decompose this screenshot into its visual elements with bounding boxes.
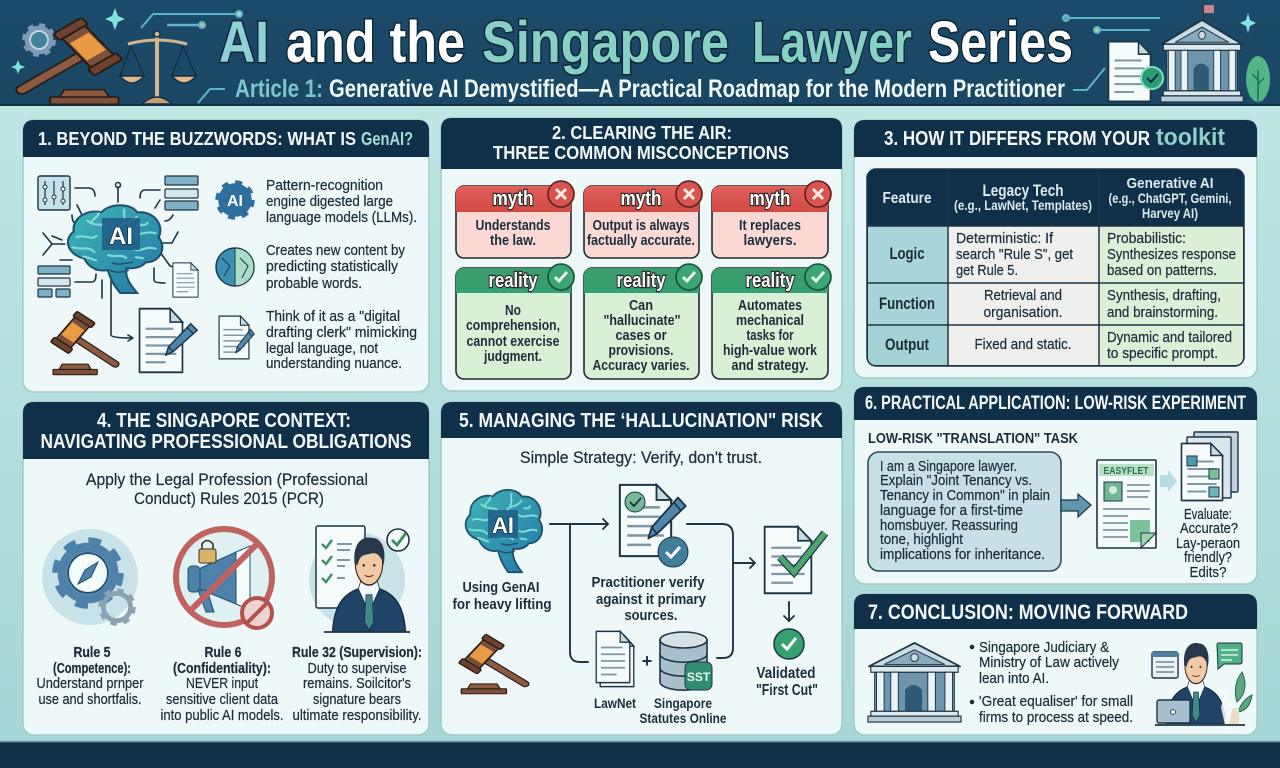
subheading: LOW-RISK "TRANSLATION" TASK	[868, 430, 1078, 447]
text: practitioner: sources.	[624, 607, 678, 624]
icon: AI brain	[466, 490, 542, 572]
myth card 1	[456, 181, 574, 258]
text: pattern recognition: engine digested large	[266, 193, 393, 210]
icon: data rows top	[165, 176, 198, 210]
network connectors	[43, 182, 178, 341]
panel 5: hallucination risk	[441, 402, 842, 735]
reality card 2	[584, 264, 702, 379]
subtitle: Generative AI Demystified—A Practical Roadmap for the Modern Practitioner	[329, 75, 1065, 103]
row: output: Output	[885, 335, 929, 354]
prompt box	[868, 452, 1061, 571]
bullet one: Singapore Judiciary &	[979, 639, 1109, 656]
arrow to flyer	[1061, 494, 1091, 517]
intro text: Apply the Legal Profession (Professional	[86, 470, 368, 489]
icon: tree	[1246, 56, 1270, 104]
row: function: Function	[879, 294, 935, 313]
rule 5 text: Understand prnper	[36, 675, 144, 692]
rule 32 text: remains. Soilcitor's	[303, 675, 411, 692]
text: practitioner: Practitioner verify	[592, 574, 705, 591]
icon: document right	[173, 263, 198, 297]
reality card 3: mechanical	[736, 313, 804, 329]
heading 4: NAVIGATING PROFESSIONAL OBLIGATIONS	[40, 431, 412, 453]
bullet one: lean into AI.	[979, 670, 1049, 687]
text: evaluate: Edits?	[1190, 564, 1226, 581]
prompt box: Explain "Joint Tenancy vs.	[880, 472, 1032, 489]
rule 5 text: (Competence):	[53, 661, 131, 677]
row: logic	[890, 230, 1236, 279]
icon: validated document	[765, 527, 825, 593]
text: using GenAI: Using GenAI	[462, 579, 540, 596]
reality card 1: No	[505, 303, 521, 319]
icon: AI gear: AI	[227, 193, 243, 210]
bullet two: 'Great equaliser' for small	[979, 693, 1133, 710]
table header row	[882, 175, 1232, 221]
title: AI	[219, 10, 269, 75]
table header row: Legacy Tech	[982, 181, 1064, 200]
panel 7: conclusion	[854, 594, 1257, 735]
decorative circuit lines right	[1063, 13, 1256, 90]
text: drafting clerk: understanding nuance.	[266, 355, 402, 372]
title: Singapore	[482, 10, 729, 75]
reality card 3: and strategy.	[732, 358, 808, 374]
bullet one: Ministry of Law actively	[979, 654, 1119, 671]
reality card 3	[712, 264, 831, 379]
rule 6 text: into public AI models.	[160, 707, 284, 724]
strategy line: Simple Strategy: Verify, don't trust.	[520, 448, 762, 467]
myth card 2	[584, 181, 702, 258]
reality card 2: "hallucinate"	[604, 313, 680, 329]
icon: gavel	[50, 311, 115, 375]
text: evaluate: Accurate?	[1180, 520, 1238, 537]
prompt box: homsbuyer. Reassuring	[880, 517, 1018, 534]
reality card 1: cannot exercise	[466, 334, 560, 350]
row: logic: based on patterns.	[1107, 262, 1217, 279]
text: evaluate	[1176, 506, 1240, 581]
icon: split brain	[216, 248, 254, 286]
icon: lawyer with laptop	[1152, 643, 1252, 734]
text: pattern recognition: language models (LLMs).	[266, 209, 417, 226]
comparison table	[867, 169, 1244, 366]
icon: large document with pen	[140, 309, 197, 372]
icon: data rows left	[38, 266, 70, 297]
source labels: Singapore	[654, 695, 712, 711]
prompt box: I am a Singapore lawyer.	[880, 458, 1017, 475]
row: output: Dynamic and tailored	[1107, 329, 1232, 346]
row: function: organisation.	[984, 304, 1062, 321]
source labels: LawNet	[594, 695, 636, 711]
myth card 1: the law.	[490, 233, 536, 249]
heading 2: 2. CLEARING THE AIR:	[552, 122, 732, 143]
source labels: Statutes Online	[640, 710, 727, 726]
icon: circuit box	[38, 176, 70, 210]
text: using GenAI	[452, 579, 552, 613]
reality card 1	[456, 264, 574, 379]
title	[219, 10, 1073, 75]
heading 1: GenAI?	[361, 128, 413, 149]
rule 5 text: Rule 5	[74, 645, 110, 661]
text: creates content: probable words.	[266, 275, 362, 292]
bullet two	[970, 693, 1133, 726]
intro text: Conduct) Rules 2015 (PCR)	[134, 489, 324, 508]
row: logic: get Rule 5.	[956, 262, 1018, 279]
rule 32 text: signature bears	[313, 691, 401, 708]
panel 4: Singapore context	[23, 402, 429, 735]
text: evaluate: friendly?	[1184, 549, 1232, 566]
table header row: (e.g., ChatGPT, Gemini,	[1108, 190, 1232, 206]
rule 6 text: (Confidentiality):	[173, 661, 271, 677]
panel 6: practical application	[854, 387, 1257, 584]
icon: AI brain: AI	[109, 223, 133, 250]
reality card 3: high-value work	[723, 343, 818, 359]
icon: supervising solicitor	[309, 526, 410, 632]
icon: courthouse	[868, 643, 961, 722]
icon: statutes database: SST	[687, 670, 711, 684]
myth card 2: Output is always	[592, 218, 690, 234]
row: output	[885, 329, 1232, 362]
reality card 3: tasks for	[746, 328, 794, 344]
icon: gavel	[22, 18, 123, 104]
myth card 2: myth	[620, 188, 662, 210]
reality card 1: reality	[488, 270, 538, 292]
reality card 2: cases or	[616, 328, 667, 344]
reality card 2: reality	[616, 270, 666, 292]
table header row: (e.g., LawNet, Templates)	[954, 197, 1092, 213]
table header row: Generative AI	[1126, 175, 1214, 192]
top banner	[0, 0, 1280, 106]
myth card 2: factually accurate.	[587, 233, 695, 249]
title: Lawyer	[752, 10, 912, 75]
bullet two: firms to process at speed.	[979, 709, 1133, 726]
myth card 3: It replaces	[739, 218, 801, 234]
text: creates content	[266, 242, 405, 292]
icon: scales of justice	[120, 31, 196, 104]
source labels	[594, 695, 727, 726]
text: using GenAI: for heavy lifting	[452, 596, 552, 613]
icon: AI brain	[68, 205, 162, 293]
icon: AI brain: AI	[492, 513, 514, 538]
heading 2	[493, 122, 789, 163]
reality card 3: Automates	[738, 298, 802, 314]
text: drafting clerk: legal language, not	[266, 340, 379, 357]
table header row: Feature	[882, 190, 932, 207]
reality card 1: judgment.	[483, 349, 542, 365]
rule 5 text: use and shortfalis.	[38, 691, 142, 708]
rule 6 text	[160, 645, 284, 724]
reality card 2: Can	[629, 298, 653, 314]
row: output: Fixed and static.	[974, 336, 1072, 353]
rule 32 text: Duty to supervise	[308, 660, 406, 677]
flow arrows	[550, 519, 794, 662]
row: output: to specific prompt.	[1107, 345, 1218, 362]
light arrow	[1160, 470, 1177, 492]
text: pattern recognition: Pattern-recognition	[266, 177, 383, 194]
bullet one	[970, 639, 1119, 687]
icon: green check	[774, 629, 804, 659]
myth card 1: myth	[492, 188, 534, 210]
icon: statutes database	[660, 632, 712, 690]
text: practitioner	[592, 574, 707, 624]
text: practitioner: against it primary	[596, 591, 707, 608]
text: creates content: predicting statistically	[266, 258, 398, 275]
icon: document and pen	[219, 316, 254, 359]
text: creates content: Creates new content by	[266, 242, 405, 259]
myth card 3: myth	[750, 188, 790, 210]
heading 7: 7. CONCLUSION: MOVING FORWARD	[868, 601, 1188, 624]
row: function: Synthesis, drafting,	[1107, 287, 1221, 304]
table header row: Harvey AI)	[1142, 205, 1198, 221]
text: evaluate: Lay-peraon	[1176, 535, 1240, 552]
panel 3: comparison toolkit	[854, 120, 1257, 378]
heading 5: 5. MANAGING THE ‘HALLUCINATION" RISK	[459, 410, 823, 432]
plus sign: +	[642, 651, 652, 671]
reality card 3: reality	[746, 270, 795, 292]
text: drafting clerk: drafting clerk" mimicking	[266, 324, 417, 341]
panel 1: what is GenAI	[23, 120, 429, 392]
reality card 2: Accuracy varies.	[592, 358, 690, 374]
icon: confidentiality no-megaphone	[176, 529, 272, 628]
title: and the	[286, 10, 465, 75]
prompt box: language for a first-time	[880, 502, 1023, 519]
row: logic: Logic	[890, 244, 924, 263]
subtitle: Article 1:	[235, 75, 323, 103]
title: Series	[928, 10, 1073, 75]
panel 2: misconceptions	[441, 118, 842, 391]
text: pattern recognition	[266, 177, 417, 226]
intro text	[86, 470, 368, 508]
icon: gear	[24, 25, 54, 55]
row: logic: Probabilistic:	[1107, 230, 1186, 247]
rule 6 text: Rule 6	[204, 645, 242, 661]
rule 32 text	[292, 645, 422, 724]
prompt box: implications for inheritance.	[880, 546, 1045, 563]
decorative circuit lines left	[11, 8, 242, 103]
icon: EASYFLET flyer	[1097, 460, 1156, 548]
row: function	[879, 287, 1221, 321]
icon: courthouse	[1161, 5, 1243, 102]
icon: signed document	[1108, 42, 1163, 101]
text: drafting clerk: Think of it as a "digital	[266, 308, 400, 325]
row: function: Retrieval and	[984, 287, 1062, 304]
text: validated first cut: "First Cut"	[756, 682, 818, 699]
icon: document stack	[1181, 432, 1238, 500]
icon: practitioner document	[620, 485, 688, 567]
rule 32 text: Rule 32 (Supervision):	[292, 645, 422, 661]
myth card 3: lawyers.	[744, 233, 796, 249]
text: drafting clerk	[266, 308, 417, 372]
heading 4: 4. THE SINGAPORE CONTEXT:	[97, 410, 351, 432]
icon: gavel	[459, 634, 525, 694]
row: function: and brainstorming.	[1107, 304, 1218, 321]
text: validated first cut	[756, 665, 818, 699]
prompt box: tone, highlight	[880, 531, 964, 548]
text: validated first cut: Validated	[756, 665, 816, 682]
reality card 2: provisions.	[608, 343, 674, 359]
heading 2: THREE COMMON MISCONCEPTIONS	[493, 142, 789, 163]
icon: EASYFLET flyer: EASYFLET	[1104, 466, 1148, 477]
row: logic: Deterministic: If	[956, 230, 1054, 247]
prompt box: Tenancy in Common" in plain	[880, 487, 1050, 504]
myth card 3	[712, 181, 831, 258]
heading 4	[40, 410, 412, 453]
icon: AI gear	[217, 182, 253, 218]
heading 3: toolkit	[1156, 124, 1225, 151]
icon: competence gears	[42, 529, 138, 625]
rule 6 text: sensitive client data	[166, 691, 279, 708]
reality card 1: comprehension,	[466, 318, 560, 334]
rule 5 text	[36, 645, 144, 708]
icon: LawNet document	[596, 631, 634, 687]
footer band	[0, 741, 1280, 768]
row: logic: search "Rule S", get	[956, 246, 1074, 263]
heading 1: 1. BEYOND THE BUZZWORDS: WHAT IS	[38, 128, 356, 149]
heading 3: 3. HOW IT DIFFERS FROM YOUR	[884, 128, 1150, 150]
row: logic: Synthesizes response	[1107, 246, 1236, 263]
text: evaluate: Evaluate:	[1184, 506, 1232, 523]
rule 32 text: ultimate responsibility.	[292, 707, 422, 724]
myth card 1: Understands	[476, 218, 550, 234]
rule 6 text: NEVER input	[186, 675, 259, 692]
